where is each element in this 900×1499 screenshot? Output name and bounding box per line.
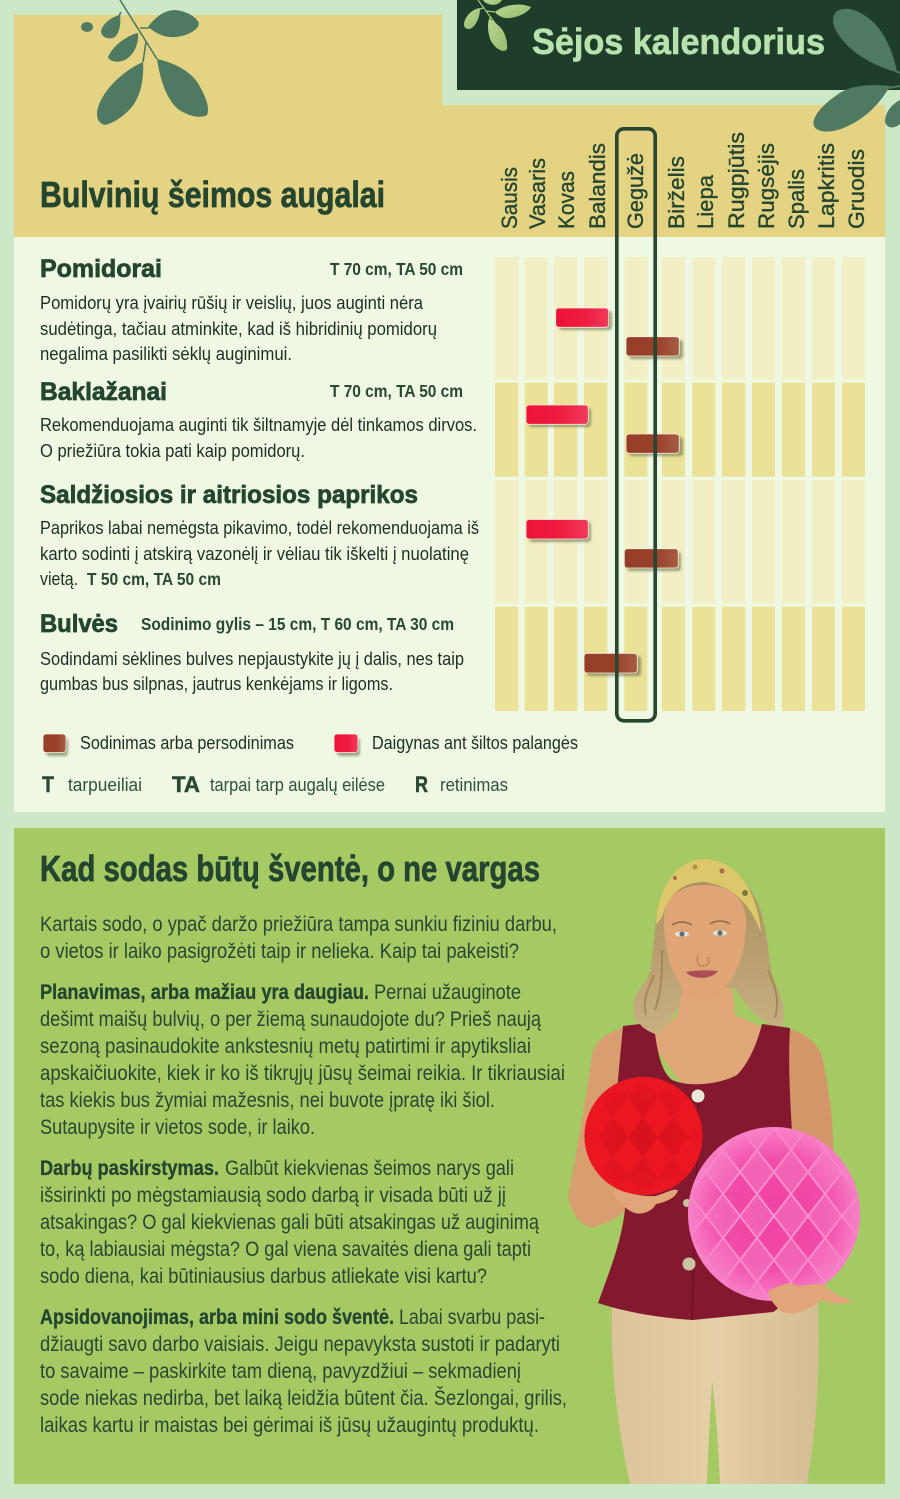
article: darbų paskirstymas: išsirinkti po mėgstamiausią sodo darbą ir visada būti už jį: [40, 1183, 506, 1207]
panel: yellow heading band: [14, 15, 885, 237]
arms: [568, 1027, 833, 1227]
legend: abbreviations: TA: [172, 772, 200, 797]
illustration: woman holding paper balls: [568, 859, 860, 1484]
month labels: Rugpjūtis: [724, 132, 749, 229]
highlight frame: Gegužė column: [617, 129, 655, 721]
legend: abbreviations: R: [415, 772, 428, 797]
crop: Bulvės: [40, 610, 464, 694]
crop: paprikos: [40, 481, 479, 589]
face: [664, 885, 746, 1000]
article: darbų paskirstymas: [40, 1156, 539, 1288]
legend: abbreviations: tarpueiliai: [68, 775, 142, 795]
crop: Baklažanai: O priežiūra tokia pati kaip pomidorų.: [40, 440, 305, 461]
panel: dark title banner: [457, 0, 900, 90]
month labels: Rugsėjis: [754, 143, 779, 229]
hair: [633, 862, 784, 1035]
article: planavimas: Planavimas, arba mažiau yra daugiau.: [40, 980, 369, 1004]
article: intro: o vietos ir laiko pasigrožėti taip ir nelieka. Kaip tai pakeisti?: [40, 939, 519, 963]
legend: abbreviations: tarpai tarp augalų eilėse: [210, 775, 385, 795]
article: planavimas: sezoną pasinaudokite ankstesnių metų patirtimi ir apytiksliai: [40, 1034, 531, 1058]
red paper ball: [584, 1077, 702, 1195]
crop: paprikos: T 50 cm, TA 50 cm: [87, 569, 221, 589]
legend: colour keys: [43, 733, 578, 756]
headscarf: [656, 859, 761, 932]
article: planavimas: dešimt maišų bulvių, o per žiemą sunaudojote du? Prieš naują: [40, 1007, 541, 1031]
bars: planting periods: [584, 337, 679, 673]
month labels: [497, 132, 869, 229]
pink paper ball: [688, 1127, 860, 1301]
crop: Pomidorai: negalima pasilikti sėklų auginimui.: [40, 343, 292, 364]
crop: paprikos: Saldžiosios ir aitriosios paprikos: [40, 481, 418, 509]
month labels: Lapkritis: [814, 143, 839, 229]
month labels: Gruodis: [844, 149, 869, 229]
article: planavimas: [40, 980, 565, 1139]
bars: indoor seedling periods: [526, 308, 609, 539]
crop: paprikos: karto sodinti į atskirą vazonėlį ir vėliau tik iškelti į nuolatinę: [40, 543, 469, 564]
hands: [614, 1190, 852, 1313]
crop: Bulvės: Sodinimo gylis – 15 cm, T 60 cm, TA 30 cm: [141, 614, 454, 634]
crop: Pomidorai: Pomidorų yra įvairių rūšių ir veislių, juos auginti nėra: [40, 292, 424, 313]
panel: light calendar background: [14, 237, 885, 812]
article: apsidovanojimas: Apsidovanojimas, arba mini sodo šventė.: [40, 1305, 394, 1329]
legend: abbreviations: retinimas: [440, 775, 508, 795]
article: planavimas: Sutaupysite ir vietos sode, ir laiko.: [40, 1115, 315, 1139]
article: darbų paskirstymas: to, ką labiausiai mėgsta? O gal viena savaitės diena gali tapti: [40, 1237, 531, 1261]
crop: Baklažanai: [40, 378, 477, 461]
month labels: Kovas: [554, 171, 579, 229]
crop: Bulvės: Sodindami sėklines bulves nepjaustykite jų į dalis, nes taip: [40, 648, 464, 669]
legend: colour keys: Daigynas ant šiltos palangės: [372, 733, 578, 753]
crop: Pomidorai: T 70 cm, TA 50 cm: [330, 259, 463, 279]
icon: light leaves in banner: [464, 0, 531, 51]
neck and chest: [650, 985, 768, 1095]
article: planavimas: tas kiekis bus žymiai mažesnis, nei buvote įpratę iki šiol.: [40, 1088, 495, 1112]
legend: colour keys: Sodinimas arba persodinimas: [80, 733, 294, 753]
article: planavimas: Pernai užauginote: [374, 980, 521, 1004]
crop: Bulvės: gumbas bus silpnas, jautrus kenkėjams ir ligoms.: [40, 673, 393, 694]
article: apsidovanojimas: [40, 1305, 567, 1437]
panel: green article background: [14, 828, 885, 1484]
crop: paprikos: Paprikos labai nemėgsta pikavimo, todėl rekomenduojama iš: [40, 517, 479, 538]
article: darbų paskirstymas: sodo diena, kai būtiniausius darbus atliekate visi kartu?: [40, 1264, 487, 1288]
nose: [697, 955, 709, 966]
month labels: Liepa: [693, 174, 718, 229]
title: Sėjos kalendorius: Sėjos kalendorius: [532, 21, 825, 62]
eyes: [672, 921, 730, 937]
trousers: [612, 1300, 819, 1484]
shirt placket and shadow: [692, 1090, 699, 1320]
crop: Pomidorai: [40, 255, 463, 364]
crop: Baklažanai: T 70 cm, TA 50 cm: [330, 381, 463, 401]
crop: paprikos: vietą.: [40, 568, 78, 589]
month labels: Balandis: [585, 143, 610, 229]
article: darbų paskirstymas: atsakingas? O gal kiekvienas gali būti atsakingas už auginimą: [40, 1210, 539, 1234]
article: planavimas: apskaičiuokite, kiek ir ko iš tikrųjų jūsų šeimai reikia. Ir tikriausiai: [40, 1061, 565, 1085]
month labels: Sausis: [497, 167, 522, 229]
heading: Bulvinių šeimos augalai: Bulvinių šeimos augalai: [40, 174, 385, 215]
crop: Baklažanai: Rekomenduojama auginti tik šiltnamyje dėl tinkamos dirvos.: [40, 414, 477, 435]
article: apsidovanojimas: sode niekas nedirba, bet laiką leidžia būtent čia. Šezlongai, grilis,: [40, 1385, 567, 1410]
shirt buttons: [682, 1090, 704, 1270]
month labels: Gegužė: [623, 153, 648, 229]
article: intro: [40, 912, 557, 963]
legend: abbreviations: T: [42, 772, 54, 797]
article: intro: Kartais sodo, o ypač daržo priežiūra tampa sunkiu fiziniu darbu,: [40, 912, 557, 936]
article: apsidovanojimas: džiaugti savo darbo vaisiais. Jeigu nepavyksta sustoti ir padaryti: [40, 1332, 560, 1356]
mouth: [686, 970, 718, 978]
icon: green branch top left: [81, 0, 208, 125]
month labels: Spalis: [784, 169, 809, 229]
shirt: [598, 1024, 792, 1320]
crop: Baklažanai: Baklažanai: [40, 378, 167, 406]
legend: abbreviations: [42, 772, 508, 797]
article: apsidovanojimas: to savaime – paskirkite tam dieną, pavyzdžiui – sekmadienį: [40, 1359, 521, 1383]
calendar grid: [495, 257, 865, 711]
article: apsidovanojimas: Labai svarbu pasi-: [399, 1305, 545, 1329]
crop: Bulvės: Bulvės: [40, 610, 118, 638]
month labels: Vasaris: [525, 158, 550, 229]
crop: Pomidorai: sudėtinga, tačiau atminkite, kad iš hibridinių pomidorų: [40, 318, 437, 339]
article: apsidovanojimas: laikas kartu ir maistas bei gėrimai iš jūsų užaugintų produktų.: [40, 1413, 539, 1437]
article: darbų paskirstymas: Darbų paskirstymas.: [40, 1156, 219, 1180]
heading: Kad sodas būtų šventė: Kad sodas būtų šventė, o ne vargas: [40, 848, 540, 889]
icon: dark leaves at right of banner: [814, 9, 900, 132]
month labels: Birželis: [664, 156, 689, 229]
bar shadows: [529, 311, 683, 676]
article: darbų paskirstymas: Galbūt kiekvienas šeimos narys gali: [225, 1156, 514, 1180]
crop: Pomidorai: Pomidorai: [40, 255, 162, 283]
